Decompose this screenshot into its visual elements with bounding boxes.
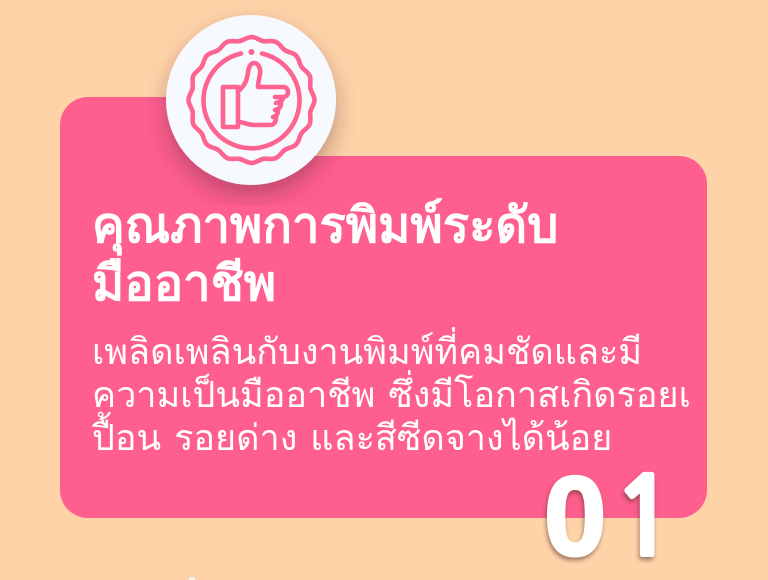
body text: ความเป็นมืออาชีพ ซึ่งมีโอกาสเกิดรอยเ [92, 374, 691, 415]
icon: thumbs-up badge [154, 14, 348, 205]
body text: เพลิดเพลินกับงานพิมพ์ที่คมชัดและมี [92, 331, 642, 372]
number 01: 1 [612, 465, 677, 572]
heading: มืออาชีพ [92, 257, 276, 311]
number 01 [543, 454, 677, 579]
heading [92, 198, 558, 311]
number 01: 0 [544, 454, 606, 579]
body text [92, 327, 691, 458]
next card peek [189, 577, 195, 580]
body text: ปื้อน รอยด่าง และสีซีดจางได้น้อย [92, 417, 612, 458]
heading: คุณภาพการพิมพ์ระดับ [92, 199, 558, 253]
